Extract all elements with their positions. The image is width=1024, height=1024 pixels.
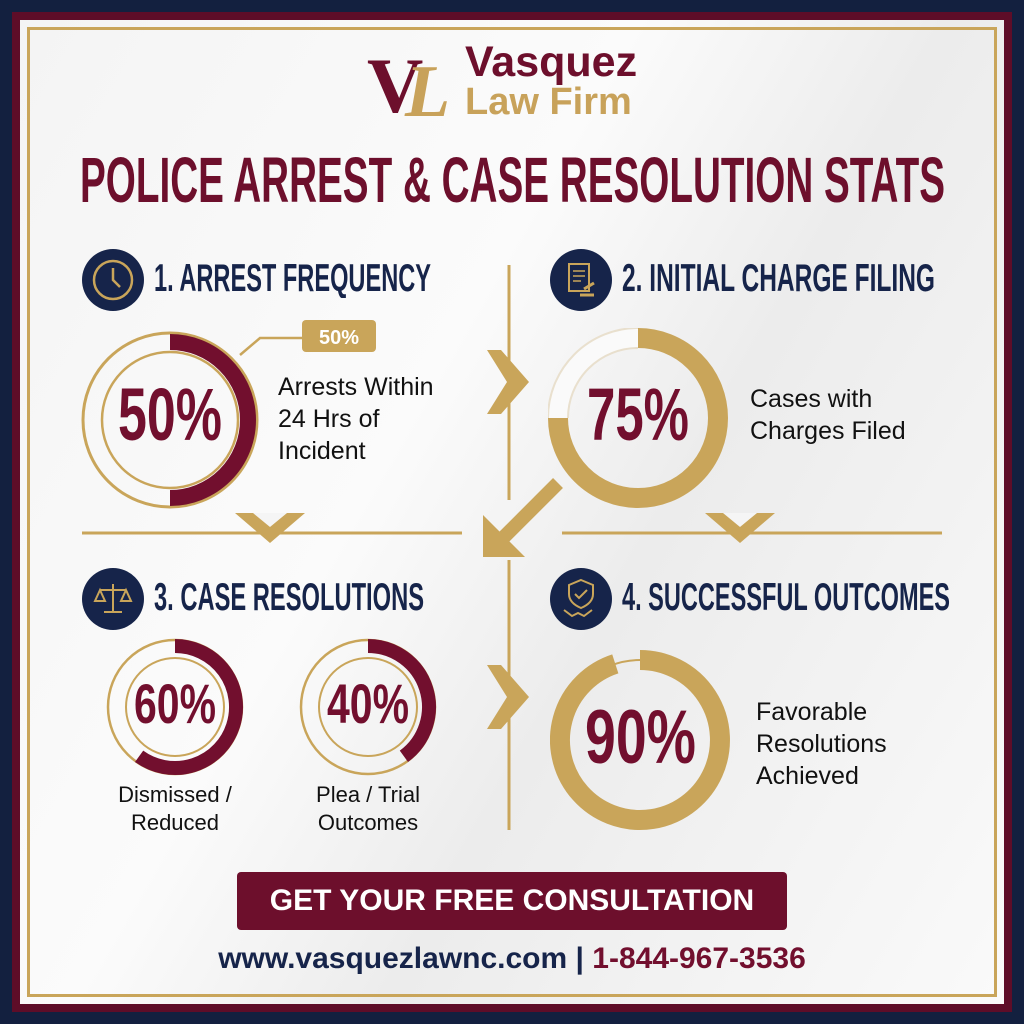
ring 40: 40% <box>327 672 409 735</box>
CTA button: GET YOUR FREE CONSULTATION <box>270 884 754 917</box>
logo <box>367 38 637 123</box>
ring 90 <box>550 650 730 830</box>
arrow: down chevron right <box>705 513 775 543</box>
CTA button <box>237 872 787 930</box>
text: Charges Filed <box>750 417 906 445</box>
text: Cases with <box>750 385 872 413</box>
icon: clock <box>82 249 144 311</box>
arrow: down chevron left <box>235 513 305 543</box>
ring 60: 60% <box>134 672 216 735</box>
text 60 <box>118 782 232 835</box>
ring 75 <box>548 328 728 508</box>
arrow: right chevron 1 <box>487 350 529 414</box>
text 40: Outcomes <box>318 810 418 835</box>
ring 90: 90% <box>585 695 696 780</box>
text <box>750 385 906 445</box>
text 40: Plea / Trial <box>316 782 420 807</box>
panel 4 <box>550 568 950 830</box>
text 60: Reduced <box>131 810 219 835</box>
ring 75: 75% <box>587 373 689 456</box>
text: 24 Hrs of <box>278 405 379 433</box>
panel 2 <box>548 249 935 508</box>
icon: scales <box>82 568 144 630</box>
icon: document gavel <box>550 249 612 311</box>
ring 40 <box>300 638 436 776</box>
text: Incident <box>278 437 366 465</box>
panel 1 <box>82 249 434 508</box>
callout 50% <box>239 320 376 356</box>
text <box>756 698 887 790</box>
text: Resolutions <box>756 730 887 758</box>
icon: handshake shield <box>550 568 612 630</box>
text 40 <box>316 782 420 835</box>
logo: Law Firm <box>465 81 632 123</box>
ring 60 <box>106 638 244 776</box>
callout 50%: 50% <box>319 327 359 349</box>
text: Favorable <box>756 698 867 726</box>
text: Arrests Within <box>278 373 434 401</box>
arrow: diagonal <box>483 478 563 557</box>
text 60: Dismissed / <box>118 782 232 807</box>
text <box>278 373 434 465</box>
text: Achieved <box>756 762 859 790</box>
panel 3 <box>82 568 436 835</box>
footer contact: www.vasquezlawnc.com | 1-844-967-3536 <box>218 942 806 975</box>
logo: Vasquez <box>465 38 637 86</box>
arrow: right chevron 2 <box>487 665 529 729</box>
ring 50 <box>82 332 258 508</box>
